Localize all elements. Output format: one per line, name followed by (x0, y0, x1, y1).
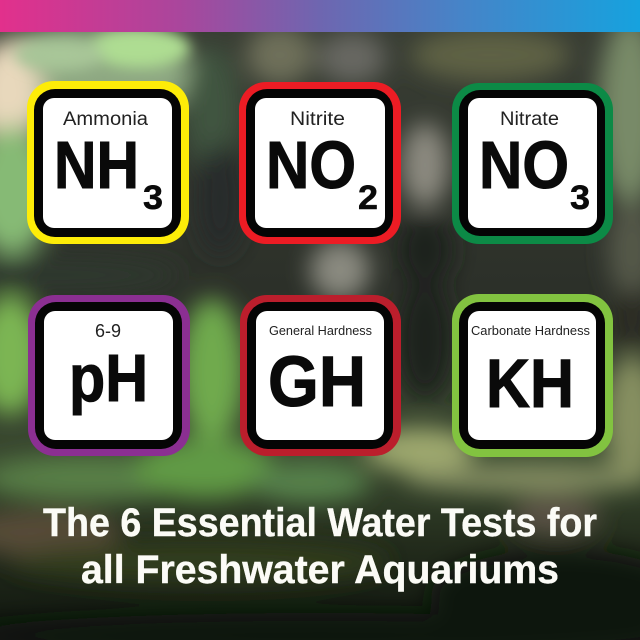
formula: NO3: NO (479, 128, 569, 203)
label: General Hardness: General Hardness (269, 323, 372, 338)
title: The 6 Essential Water Tests for (43, 501, 597, 545)
label: Nitrate: Nitrate (500, 109, 559, 130)
label: Ammonia: Ammonia (63, 109, 148, 130)
subscript 2: 2 (358, 179, 378, 217)
formula: NO2: NO (266, 128, 356, 203)
subscript 3: 3 (143, 179, 163, 217)
formula: KH: KH (486, 345, 574, 422)
label: Carbonate Hardness: Carbonate Hardness (471, 323, 590, 338)
tile: nitrate NO3 (452, 83, 613, 244)
tile: carbonate hardness KH (452, 294, 613, 457)
tile: general hardness GH (240, 295, 401, 456)
formula: NH3: NH (54, 128, 139, 203)
tile: ammonia NH3 (27, 81, 189, 244)
top gradient bar (0, 0, 640, 32)
tile: nitrite NO2 (239, 82, 401, 244)
title second line: all Freshwater Aquariums (81, 548, 559, 592)
formula: GH: GH (268, 343, 366, 422)
label: 6-9: 6-9 (95, 321, 121, 341)
label: Nitrite: Nitrite (290, 109, 345, 130)
title (43, 501, 597, 592)
tile: pH (28, 295, 190, 456)
subscript 3: 3 (570, 179, 590, 217)
formula: pH: pH (69, 341, 148, 416)
